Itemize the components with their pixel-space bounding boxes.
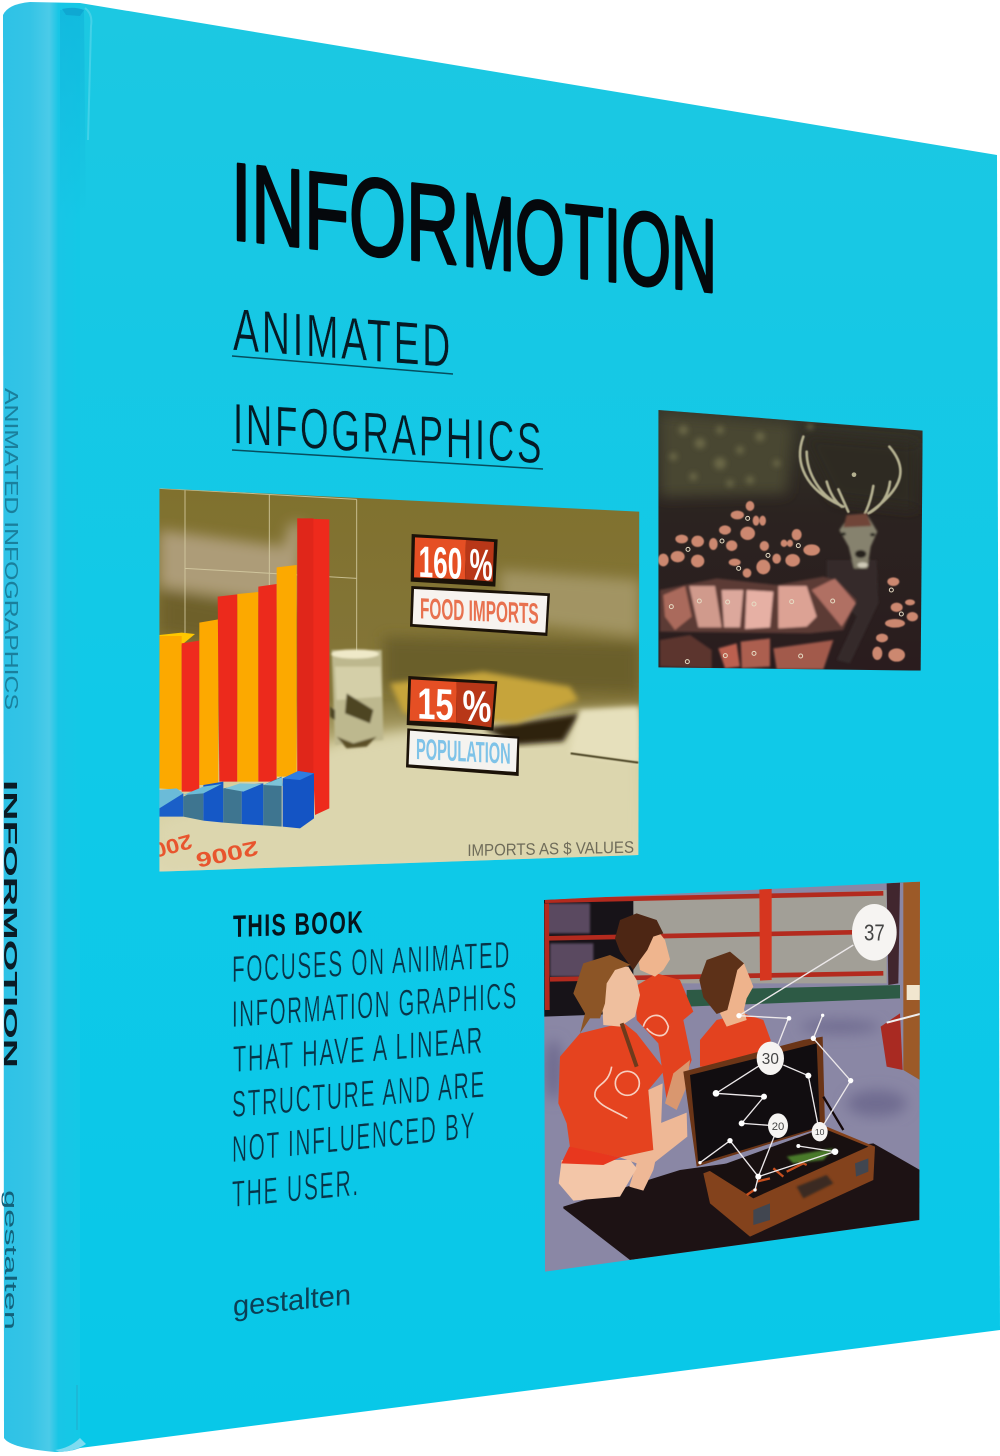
plate shadow — [483, 713, 580, 745]
photo: bar chart on table: 200 — [150, 829, 195, 862]
subtitle line 2: INFOGRAPHICS — [233, 392, 544, 477]
callout: 160 %: 160 % — [419, 538, 493, 590]
floor patches — [543, 1020, 907, 1117]
glass — [330, 649, 383, 748]
description text block: NOT INFLUENCED BY — [232, 1104, 476, 1170]
markers — [669, 516, 903, 664]
child: left — [558, 955, 687, 1201]
callout: 160 % — [411, 534, 498, 590]
child: right — [699, 952, 771, 1067]
node 30 — [757, 1042, 784, 1075]
wall — [633, 890, 887, 983]
node 30: 30 — [762, 1051, 779, 1068]
blurred background objects — [159, 523, 640, 872]
description text block: FOCUSES ON ANIMATED — [232, 933, 511, 990]
year labels: 2006 — [194, 836, 260, 871]
3d bars — [160, 632, 195, 645]
node 37 — [852, 904, 897, 961]
callout: food imports — [410, 586, 550, 636]
blue base — [159, 788, 183, 810]
node 10: 10 — [815, 1127, 825, 1137]
node 10 — [812, 1122, 828, 1141]
photo: children with suitcase and network graphic — [540, 880, 923, 1280]
network lines — [700, 945, 853, 1190]
blanket — [563, 1143, 920, 1260]
callout: food imports: FOOD IMPORTS — [420, 592, 539, 631]
description text block: THAT HAVE A LINEAR — [233, 1018, 484, 1080]
title: MOTION — [462, 172, 717, 315]
foliage speckles — [669, 424, 813, 487]
callout: 15 %: 15 % — [417, 679, 491, 732]
callout: 15 % — [407, 676, 497, 732]
suitcase — [683, 1037, 875, 1237]
spine publisher name: gestalten — [1, 1190, 20, 1330]
subtitle line 1: ANIMATED — [233, 296, 453, 380]
spine title: INFORMOTION — [0, 780, 21, 1068]
description text block: INFORMATION GRAPHICS — [232, 974, 518, 1035]
description heading: THIS BOOK — [233, 904, 364, 944]
spine subtitle: ANIMATED INFOGRAPHICS — [1, 388, 21, 710]
node 20 — [768, 1113, 788, 1138]
caption: IMPORTS AS $ VALUES — [467, 838, 634, 860]
description text block: THE USER. — [232, 1161, 360, 1215]
subtitle line 1 — [232, 296, 453, 380]
description text block: STRUCTURE AND ARE — [232, 1063, 486, 1125]
grid lines — [159, 488, 357, 667]
body meat strip — [660, 577, 857, 669]
node 20: 20 — [772, 1121, 784, 1133]
node 37: 37 — [864, 920, 885, 946]
right side post — [883, 882, 920, 1080]
upper meat cuts — [658, 501, 918, 662]
callout: population: POPULATION — [416, 733, 511, 771]
shirt graphic — [595, 1015, 668, 1118]
title — [231, 140, 717, 315]
deer head — [827, 513, 878, 663]
title: INFOR — [231, 140, 459, 288]
antlers — [800, 437, 900, 513]
paper on table — [570, 707, 639, 763]
description text block — [232, 933, 518, 1215]
book spine — [0, 2, 91, 1452]
ropes — [545, 893, 883, 1010]
photo: bar chart on table — [150, 487, 643, 873]
subtitle line 2 — [232, 392, 544, 477]
callout: population — [406, 728, 519, 776]
child: back — [615, 913, 693, 1110]
photo: deer with meat cuts — [657, 408, 925, 673]
publisher logo: gestalten — [233, 1279, 351, 1323]
